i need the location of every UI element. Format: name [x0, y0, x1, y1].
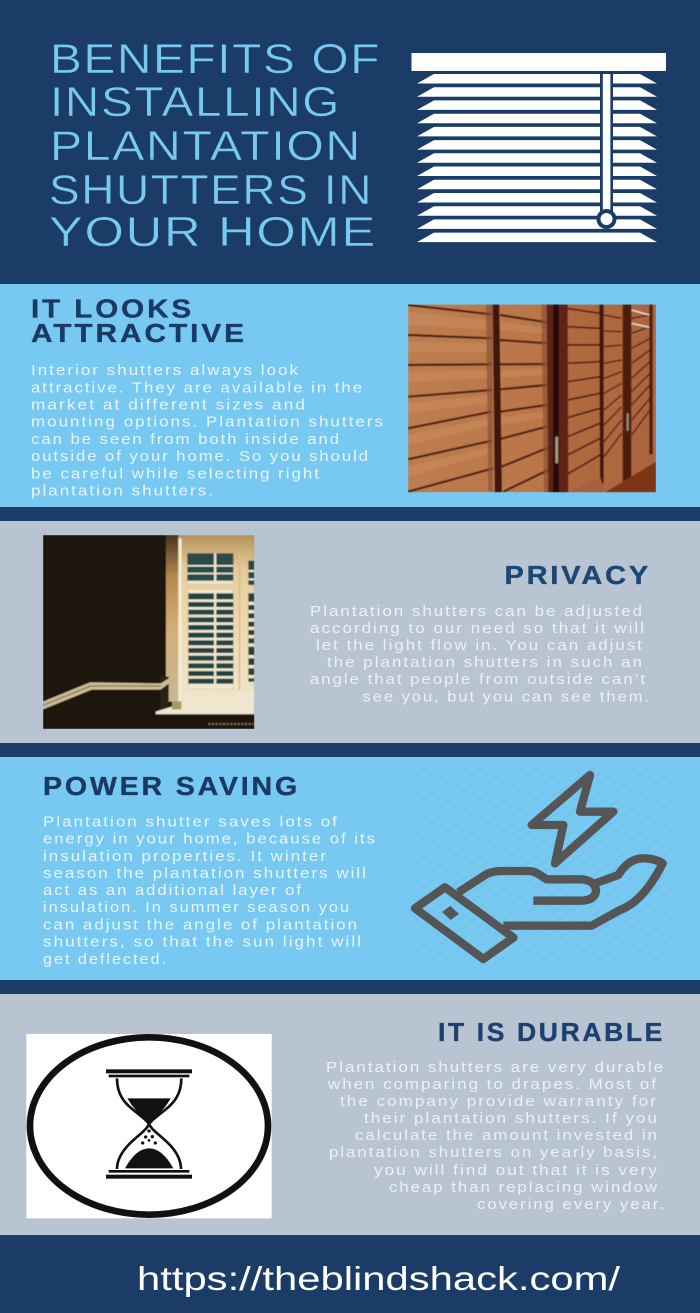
panel: privacy — [0, 521, 700, 743]
heading: it is durable: IT IS DURABLE — [438, 1019, 665, 1047]
text block: durable description: Plantation shutters are very durable — [326, 1059, 665, 1076]
text block: attractive description: Interior shutters always look — [31, 362, 300, 379]
title: YOUR HOME — [49, 208, 377, 255]
text block: durable description: their plantation shutters. If you — [364, 1110, 659, 1127]
text block: privacy description: the plantation shutters in such an — [327, 654, 644, 671]
vertical stiles and frames — [493, 304, 653, 492]
text block: privacy description: let the light flow in. You can adjust — [316, 637, 644, 654]
text block: durable description: you will find out that it is very — [374, 1162, 659, 1179]
image: hourglass in oval — [26, 1034, 272, 1218]
title: BENEFITS OF — [50, 35, 381, 82]
text block: attractive description: attractive. They are available in the — [31, 379, 364, 396]
text block: durable description: plantation shutters on yearly basis, — [329, 1144, 659, 1161]
footer panel — [0, 1235, 700, 1313]
text block: durable description: covering every year. — [477, 1196, 666, 1213]
text block: power saving description: can adjust the angle of plantation — [43, 917, 359, 934]
text block: power saving description — [43, 814, 377, 968]
header panel — [0, 0, 700, 284]
icon: hand holding lightning bolt — [415, 768, 675, 965]
heading: it looks attractive: IT LOOKS — [31, 296, 194, 324]
text block: durable description: calculate the amount invested in — [355, 1127, 659, 1144]
text block: power saving description: Plantation shutter saves lots of — [43, 814, 339, 831]
text block: power saving description: act as an additional layer of — [43, 882, 303, 899]
hinges and highlights — [555, 437, 558, 463]
text block: power saving description: energy in your home, because of its — [43, 831, 377, 848]
second window — [248, 561, 254, 585]
text block: power saving description: insulation properties. It winter — [43, 848, 328, 865]
heading: privacy: PRIVACY — [504, 562, 651, 590]
text block: privacy description: Plantation shutters can be adjusted — [310, 603, 644, 620]
heading: it looks attractive: ATTRACTIVE — [31, 320, 247, 348]
text block: attractive description: mounting options. Plantation shutters — [31, 414, 385, 431]
panel: it looks attractive — [0, 284, 700, 507]
image: room with window shutters photo — [43, 535, 254, 729]
slat highlights — [408, 312, 547, 477]
text block: attractive description: outside of your home. So you should — [31, 448, 370, 465]
text block: privacy description: according to our need so that it will — [310, 620, 646, 637]
heading: it looks attractive — [31, 296, 247, 348]
text block: attractive description: be careful while selecting right — [31, 465, 321, 482]
text block: privacy description: angle that people from outside can’t — [310, 671, 647, 688]
text block: power saving description: season the plantation shutters will — [43, 865, 368, 882]
text block: attractive description: plantation shutters. — [31, 482, 215, 500]
title — [49, 35, 381, 255]
text block: attractive description — [31, 362, 385, 500]
text block: attractive description: can be seen from both inside and — [31, 431, 341, 448]
upper shutter — [187, 553, 233, 584]
title: SHUTTERS IN — [49, 166, 373, 213]
title: INSTALLING — [50, 78, 341, 125]
text block: power saving description: shutters, so that the sun light will — [43, 934, 363, 951]
title: PLANTATION — [50, 122, 362, 169]
sill — [156, 693, 254, 714]
text block: power saving description: get deflected. — [43, 951, 168, 968]
louvre shadow lines — [408, 305, 650, 492]
text block: attractive description: market at different sizes and — [31, 396, 307, 413]
stile shadows — [486, 304, 550, 492]
panel: it is durable — [0, 994, 700, 1235]
image: wooden shutters photo — [408, 304, 656, 492]
icon: window blind — [412, 53, 666, 242]
text block: durable description — [326, 1059, 666, 1213]
text block: power saving description: insulation. In summer season you — [43, 899, 351, 916]
text block: privacy description: see you, but you can see them. — [362, 688, 651, 706]
floor — [605, 462, 656, 492]
footer url: https://theblindshack.com/ — [137, 1260, 621, 1297]
dado rail — [43, 678, 170, 709]
text block: durable description: cheap than replacing window — [389, 1179, 659, 1196]
text block: durable description: when comparing to drapes. Most of — [327, 1076, 658, 1093]
heading: power saving: POWER SAVING — [43, 773, 300, 801]
text block: privacy description — [310, 603, 651, 706]
panel: power saving — [0, 757, 700, 980]
text block: durable description: the company provide warranty for — [340, 1093, 658, 1110]
lower shutter — [188, 590, 233, 689]
